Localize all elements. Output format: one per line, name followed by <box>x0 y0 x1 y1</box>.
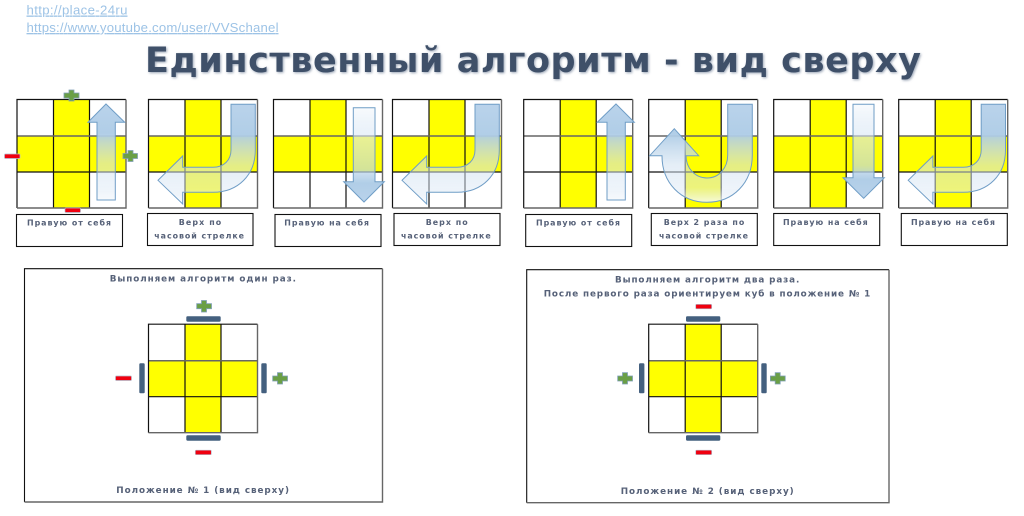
panel 2 markers <box>618 304 785 455</box>
marker: minus bottom <box>65 208 80 212</box>
step 2 label <box>148 214 253 246</box>
panel: position 1 <box>24 269 382 502</box>
step 6 label: Верх 2 раза по <box>664 218 745 227</box>
step 6: grid with U-turn arrow <box>649 100 758 208</box>
panel 2 cross grid <box>649 324 758 433</box>
step 3 label: Правую на себя <box>284 218 369 228</box>
step 5: grid with arrow up <box>524 100 634 208</box>
step 1 label <box>16 214 122 246</box>
link: youtube channel: https://www.youtube.com/user/VVSchanel <box>26 20 279 35</box>
step 5 label <box>526 214 632 246</box>
step 8: grid with bent arrow <box>899 100 1008 208</box>
panel: position 2 <box>527 270 889 503</box>
step 3 label <box>275 214 381 246</box>
link: place-24ru: http://place-24ru <box>26 2 128 18</box>
step 1 label: Правую от себя <box>27 218 111 228</box>
step 7 label <box>774 214 880 246</box>
step 2 label: часовой стрелке <box>154 231 244 240</box>
step 8 label <box>901 214 1007 246</box>
panel 2 subheading: После первого раза ориентируем куб в положение № 1 <box>544 289 870 300</box>
step 4: grid with bent arrow <box>392 100 502 208</box>
marker: minus left <box>4 154 20 158</box>
step 5 label: Правую от себя <box>536 218 620 228</box>
marker: plus top <box>64 90 79 101</box>
panel 2 heading: Выполняем алгоритм два раза. <box>615 276 799 286</box>
step 3: grid with arrow down <box>274 100 384 208</box>
step 7 label: Правую на себя <box>783 217 868 227</box>
step 6 label <box>651 214 757 246</box>
step 4 label: Верх по <box>426 218 468 227</box>
panel 1 caption: Положение № 1 (вид сверху) <box>116 486 289 496</box>
panel 1 markers <box>116 300 288 455</box>
step 7: grid with arrow down <box>774 100 884 208</box>
panel 1 heading: Выполняем алгоритм один раз. <box>110 275 296 285</box>
title: Единственный алгоритм - вид сверху <box>145 41 921 81</box>
step 6 label: часовой стрелке <box>659 231 748 240</box>
panel 2 caption: Положение № 2 (вид сверху) <box>621 487 794 497</box>
panel 1 cross grid <box>148 324 258 433</box>
step 1: grid with arrow up <box>17 100 126 208</box>
step 4 label <box>394 214 500 246</box>
step 8 label: Правую на себя <box>911 217 995 227</box>
step 2: grid with bent arrow <box>148 100 258 208</box>
marker: plus right <box>123 150 138 162</box>
step 2 label: Верх по <box>179 218 222 227</box>
step 4 label: часовой стрелке <box>401 231 491 240</box>
